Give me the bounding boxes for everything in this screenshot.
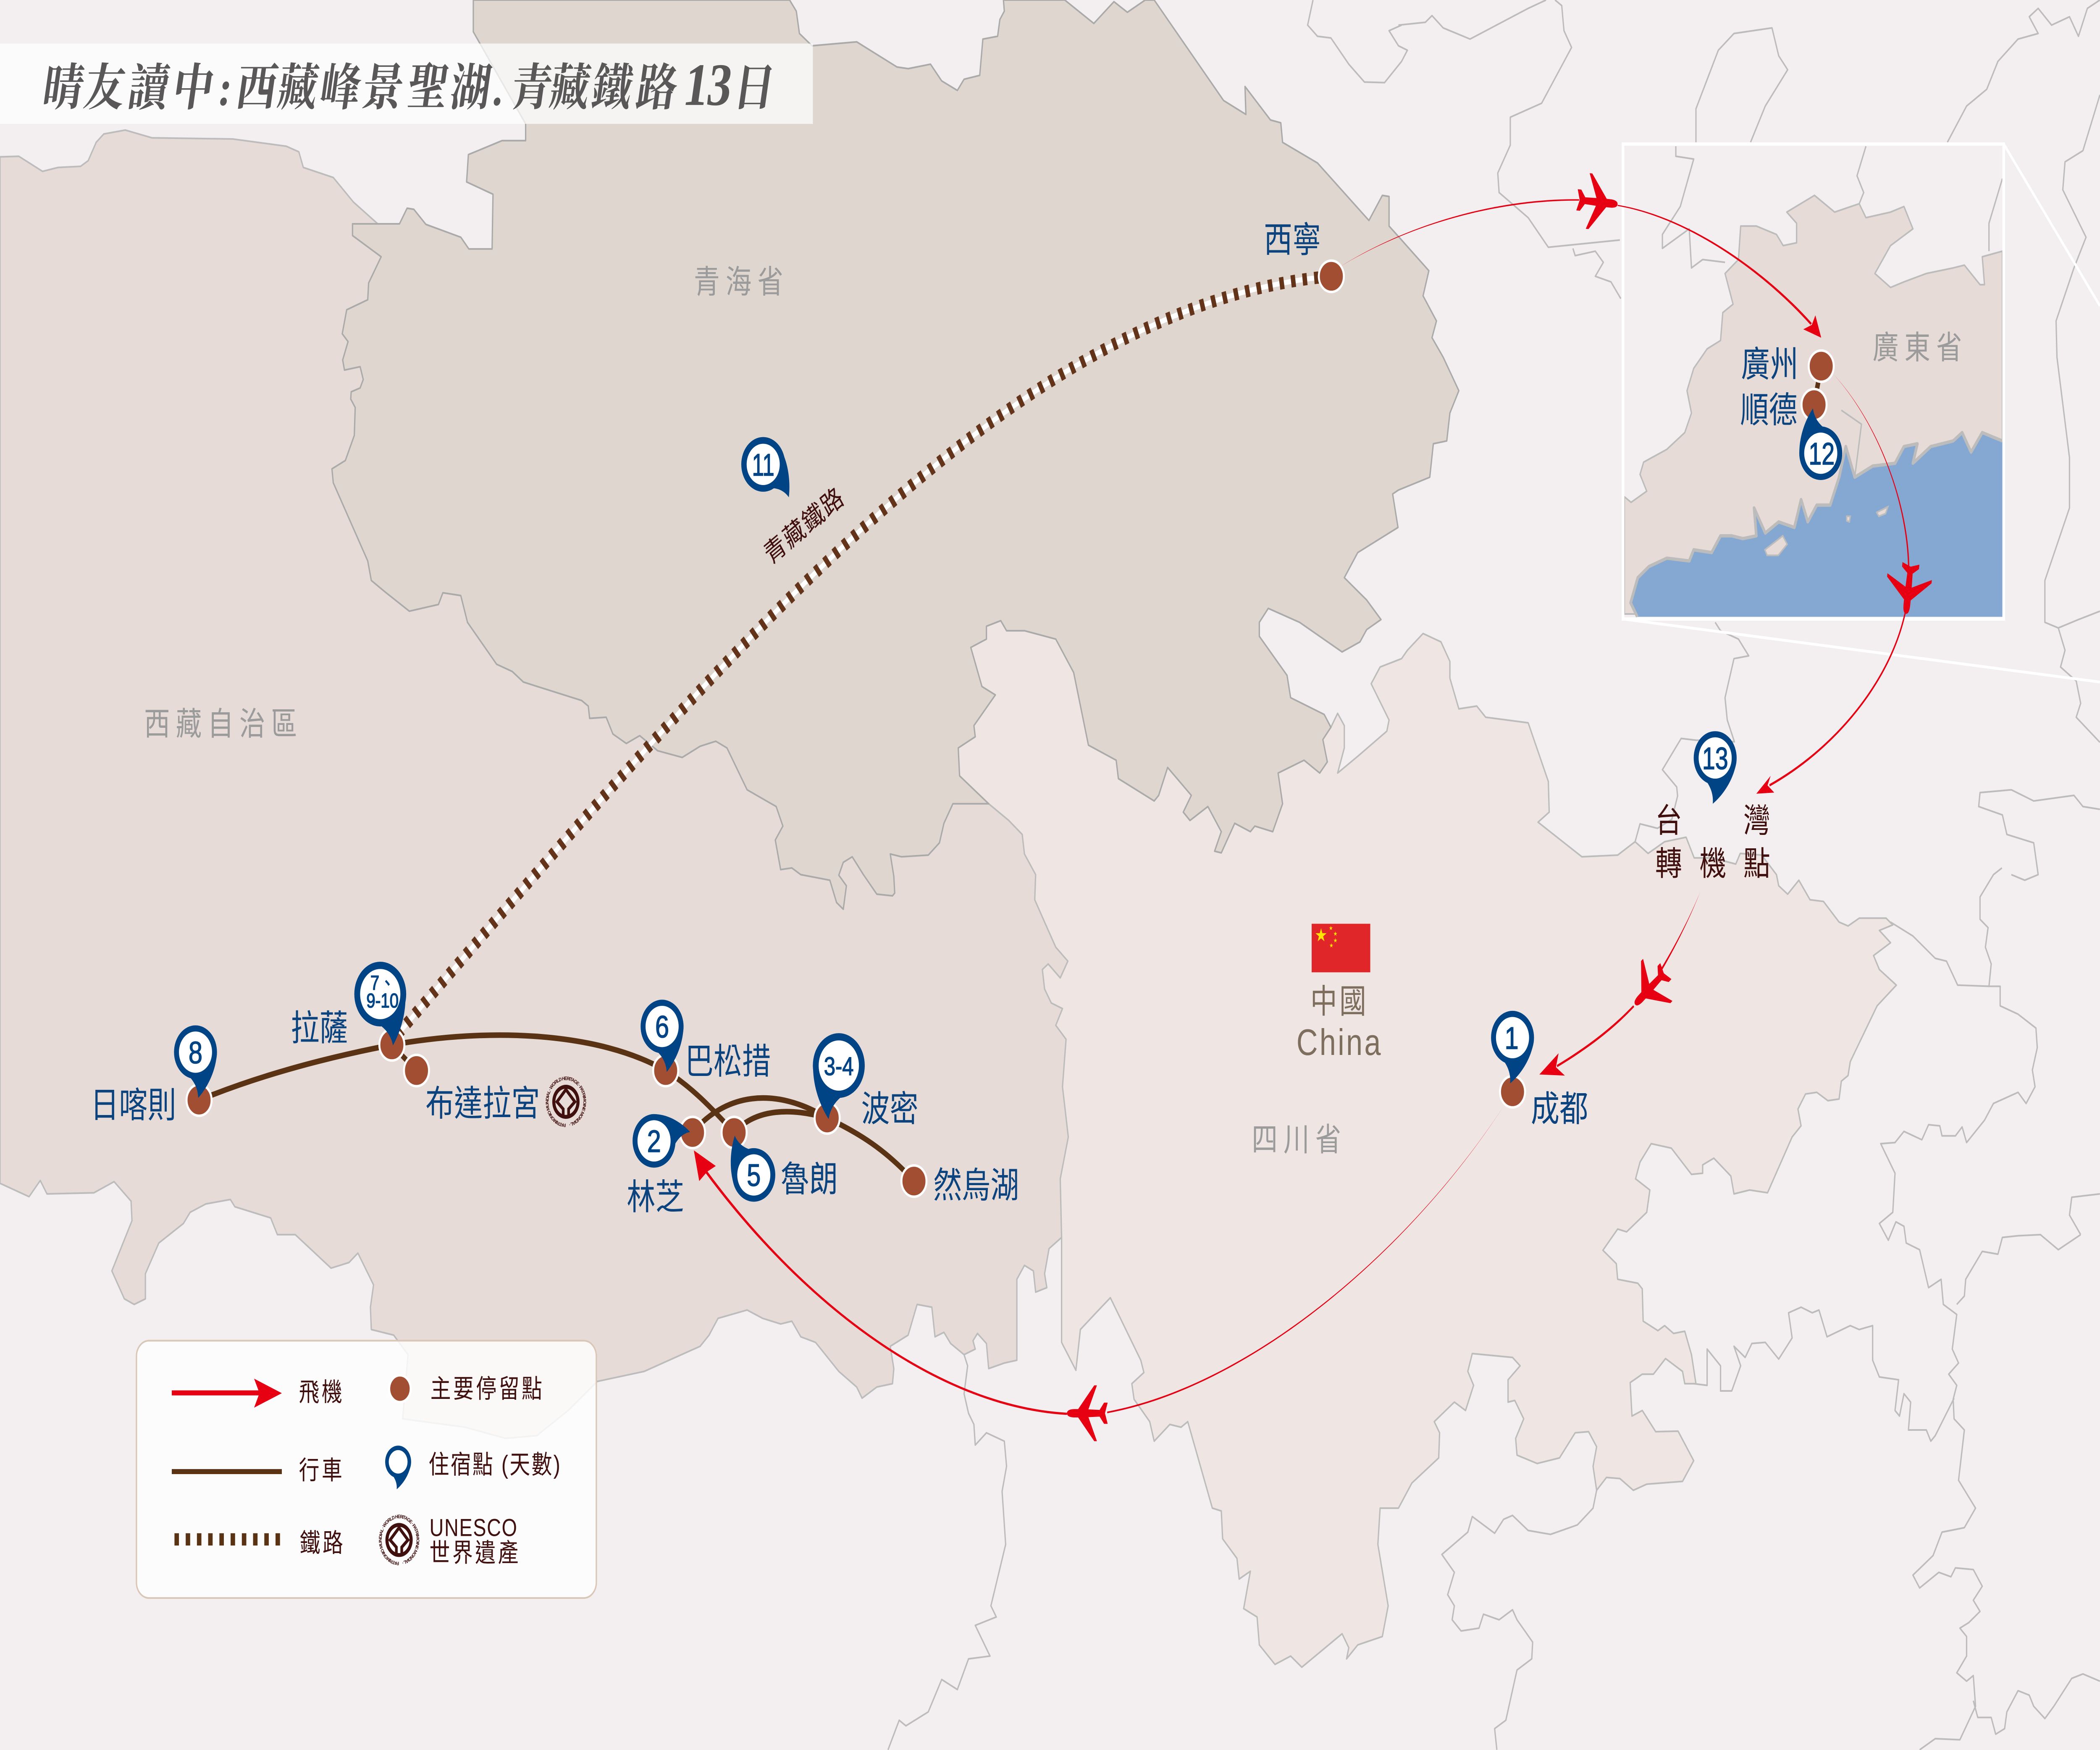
city labels: 西寧 — [1264, 220, 1321, 260]
pin: days 7, 9-10: 7 — [370, 972, 379, 994]
legend: UNESCO label — [430, 1514, 521, 1567]
neighbouring province outlines — [888, 0, 2100, 1750]
pin: day 2: 2 — [647, 1124, 661, 1159]
legend: rail line — [174, 1535, 281, 1544]
pin: day 5 — [718, 1125, 775, 1202]
icon: plane south of Sichuan — [1067, 1385, 1108, 1441]
province labels: 西藏自治區 — [144, 706, 303, 742]
city labels — [90, 220, 1798, 1217]
region: Sichuan province — [953, 614, 1896, 1667]
legend panel — [136, 1341, 596, 1598]
arrowhead: to Taiwan — [1756, 776, 1774, 794]
title: 晴友讀中:西藏峰景聖湖.青藏鐵路 — [39, 60, 681, 116]
province labels — [144, 264, 1968, 1158]
label: Taiwan transfer point: 灣 — [1743, 803, 1770, 840]
Guangdong province area — [1625, 195, 2003, 614]
pin: day 12: 12 — [1809, 437, 1835, 471]
label: Taiwan transfer point: 轉 — [1655, 845, 1682, 883]
legend: stay label: 住宿點 (天數) — [428, 1451, 562, 1479]
icon: plane south of Guangdong — [1884, 560, 1933, 617]
pin: day 11: 11 — [752, 448, 774, 483]
icon: China flag — [1312, 924, 1370, 972]
pin: day 6: 6 — [655, 1010, 669, 1044]
city labels: 拉薩 — [291, 1008, 348, 1048]
province labels: 廣東省 — [1873, 330, 1968, 366]
legend: UNESCO label: UNESCO — [430, 1514, 518, 1542]
pin: days 3-4: 3-4 — [824, 1052, 854, 1081]
legend: road label: 行車 — [299, 1456, 344, 1485]
title: 13 — [680, 52, 737, 118]
label: Taiwan transfer point: 機 — [1699, 845, 1726, 883]
country label: China: 中國 — [1310, 984, 1368, 1021]
inset map: Guangdong — [1623, 144, 2004, 619]
city labels: 林芝 — [627, 1178, 684, 1217]
arrowhead: to Chengdu — [1539, 1053, 1565, 1076]
pin: day 8: 8 — [189, 1036, 202, 1070]
pin: days 3-4 — [806, 1033, 865, 1123]
icon: UNESCO logo at Potala: PATRIMONIO MUNDIAL · WORLD HERITAGE · PATRIMOINE MONDIAL · — [545, 1076, 587, 1128]
pin: days 7, 9-10 — [354, 962, 415, 1052]
pin: day 8 — [174, 1025, 217, 1098]
pin: day 1: 1 — [1505, 1021, 1519, 1056]
legend: flight label: 飛機 — [299, 1378, 344, 1406]
main stop dots — [186, 261, 1834, 1197]
title: 日 — [730, 60, 778, 116]
inset frame — [1623, 144, 2004, 619]
city labels: 日喀則 — [90, 1086, 176, 1126]
routes: road trips — [199, 366, 1821, 1181]
legend: UNESCO logo: PATRIMONIO MUNDIAL · WORLD HERITAGE · PATRIMOINE MONDIAL · — [378, 1514, 420, 1566]
icon: plane near Xining — [1575, 172, 1620, 232]
arrowhead: to Linzhi — [694, 1150, 716, 1181]
pin: day 12 — [1794, 405, 1842, 480]
city labels: 成都 — [1531, 1089, 1588, 1129]
inset connector lines — [1623, 144, 2100, 682]
routes: flights — [694, 199, 1909, 1415]
pin: day 13: 13 — [1702, 741, 1728, 776]
city labels: 廣州 — [1741, 345, 1798, 385]
legend: stop dot — [389, 1375, 411, 1402]
pin: day 1 — [1491, 1011, 1534, 1087]
city labels: 波密 — [861, 1089, 919, 1129]
pin: day 5: 5 — [747, 1158, 761, 1193]
pin: day 2 — [633, 1109, 692, 1168]
city labels: 魯朗 — [781, 1160, 838, 1199]
region: Qinghai province — [332, 0, 1459, 909]
city labels: 順德 — [1740, 391, 1798, 430]
country label: China — [1297, 984, 1383, 1063]
legend: flight arrow — [172, 1379, 282, 1408]
title band — [0, 44, 813, 124]
label: Taiwan transfer point: 台 — [1655, 803, 1682, 840]
pin: day 6 — [640, 1000, 685, 1073]
city labels: 然烏湖 — [933, 1166, 1019, 1206]
country label: China: China — [1297, 1021, 1383, 1063]
pin: day 13 — [1694, 731, 1737, 807]
icon: plane near Chengdu — [1620, 950, 1680, 1026]
province labels: 青海省 — [694, 264, 789, 300]
pin: days 7, 9-10: 、 — [380, 974, 394, 994]
route: Qinghai-Tibet railway — [398, 278, 1320, 1034]
label: Taiwan transfer point: 點 — [1743, 845, 1770, 883]
legend: stay pin — [385, 1446, 411, 1491]
pin: day 11 — [741, 437, 803, 512]
pin: days 7, 9-10: 9-10 — [366, 990, 399, 1012]
label: Qinghai-Tibet railway: 青藏鐵路 — [760, 482, 849, 570]
legend: stop label: 主要停留點 — [430, 1375, 544, 1403]
region: Tibet autonomous region — [0, 130, 1068, 1438]
city labels: 布達拉宮 — [425, 1084, 540, 1124]
legend: rail label: 鐵路 — [300, 1529, 345, 1557]
sea — [1630, 433, 2003, 617]
legend: UNESCO label: 世界遺產 — [430, 1539, 521, 1567]
province labels: 四川省 — [1252, 1122, 1347, 1158]
legend: road line — [172, 1469, 282, 1474]
arrowhead: to Guangzhou — [1803, 315, 1821, 338]
city labels: 巴松措 — [685, 1042, 771, 1082]
